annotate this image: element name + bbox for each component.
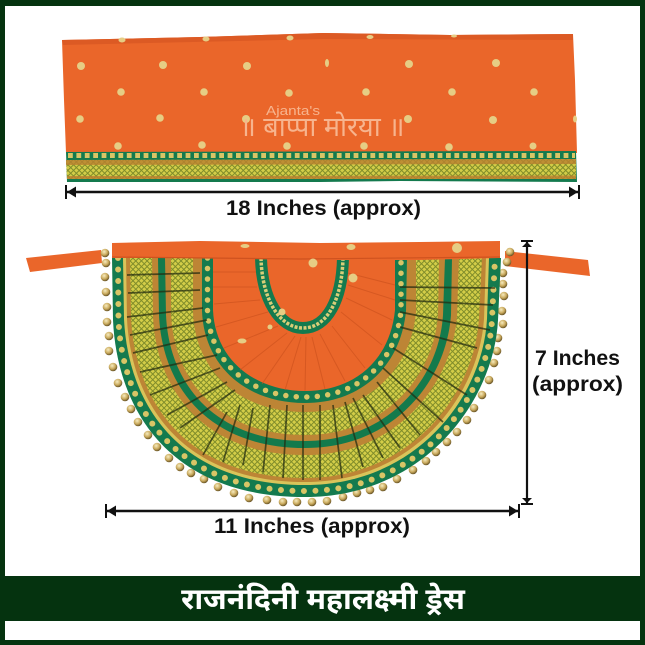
neckline U trim: [261, 258, 343, 328]
right tie: [505, 251, 590, 276]
top hem shade: [62, 33, 573, 45]
rust stripes inside center: [165, 258, 445, 441]
rust stripes beside center: [152, 258, 459, 455]
arrow: 18 inches width: [66, 185, 579, 199]
arrow: 7 inches height: [521, 241, 533, 504]
rust stripes in border: [66, 159, 576, 165]
orange center: [213, 258, 395, 391]
label: 11 inches: 11 Inches (approx): [214, 514, 410, 538]
title: राजनंदिनी महालक्ष्मी ड्रेस: [181, 581, 466, 617]
arrow: 11 inches width: [106, 504, 519, 518]
watermark: Ajanta's: [266, 103, 321, 118]
outer lattice ring: [130, 258, 482, 478]
gold dots on skirt: [238, 243, 462, 344]
pleat shadows: [127, 273, 495, 480]
gold motif row: [68, 153, 575, 158]
inner green band: [202, 258, 407, 403]
label: 18 inches: 18 Inches (approx): [226, 196, 421, 220]
gold dots on fabric: [76, 34, 577, 151]
lattice woven border: [66, 159, 576, 179]
left tie: [26, 250, 102, 272]
orange pleat lines: [213, 272, 395, 391]
outer gold line: [123, 258, 489, 485]
orange fabric: [62, 33, 577, 153]
gold motifs on outer band: [118, 258, 495, 491]
label: 7 inches: 7 Inches: [535, 346, 620, 370]
neckline gold trim: [261, 258, 343, 328]
outer rust stripes: [126, 258, 486, 482]
inner rust stripes: [193, 258, 416, 412]
title band: [0, 576, 645, 621]
green zari border: [66, 151, 577, 182]
waistband: [112, 241, 500, 260]
gold motifs on inner band: [208, 258, 401, 397]
outer green band: [112, 258, 501, 497]
waistband stitch line: [112, 257, 500, 259]
center green stripe: [158, 258, 452, 448]
panel: pleated half-round skirt: [26, 241, 590, 506]
panel: straight fabric piece: [62, 33, 577, 182]
inner lattice ring: [171, 258, 439, 435]
label: approx: (approx): [532, 372, 623, 396]
watermark: ॥ बाप्पा मोरया ॥: [240, 112, 404, 142]
gold bells edge: [101, 248, 514, 506]
